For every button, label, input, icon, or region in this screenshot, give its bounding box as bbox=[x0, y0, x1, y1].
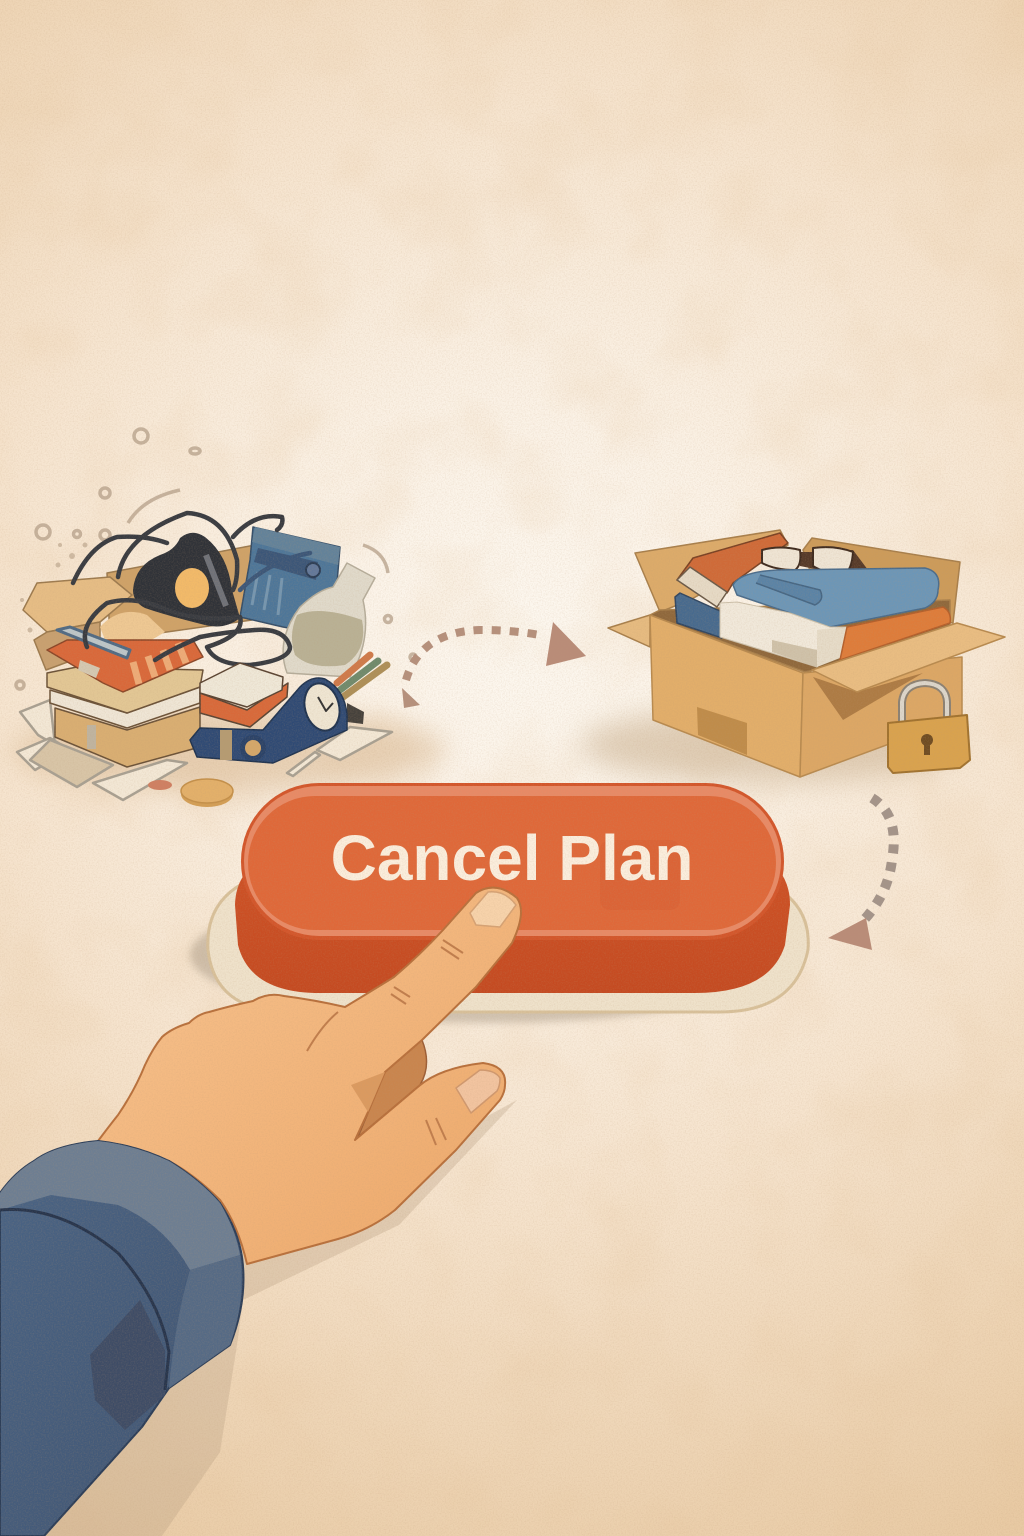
palm, thumb and index finger bbox=[98, 888, 521, 1264]
button top bbox=[241, 783, 784, 940]
button base plate bbox=[190, 880, 808, 1023]
black headset bbox=[133, 533, 240, 626]
button side bbox=[235, 850, 790, 993]
dashed arrow: pile to box bbox=[402, 622, 586, 708]
glasses bbox=[762, 547, 868, 576]
thumbnail bbox=[456, 1070, 500, 1113]
tangled cables bbox=[73, 513, 310, 713]
tan cloth bbox=[100, 612, 165, 645]
hand pressing button bbox=[0, 888, 521, 1536]
torn cardboard box bbox=[23, 545, 255, 670]
sleeve cuff bbox=[0, 1141, 244, 1536]
orange book bbox=[677, 533, 788, 607]
loose papers bbox=[17, 700, 392, 800]
blue box bbox=[675, 593, 722, 638]
Cancel Plan button bbox=[190, 783, 808, 1023]
index fingernail bbox=[470, 892, 516, 927]
hand and sleeve cast shadow bbox=[44, 1100, 517, 1536]
blue jar bbox=[240, 527, 340, 630]
back flaps bbox=[608, 530, 960, 672]
scattered dust circles bbox=[16, 429, 416, 689]
blue desk clock bbox=[190, 678, 364, 763]
book stack bbox=[47, 667, 203, 767]
striped orange towel bbox=[47, 627, 203, 692]
folded blue towel bbox=[733, 568, 939, 627]
finger-thumb crease bbox=[351, 1072, 385, 1112]
dashed arrow: box to button bbox=[828, 798, 894, 950]
cluttered pile of belongings bbox=[15, 429, 445, 807]
pencils bbox=[337, 655, 387, 697]
hidden middle finger bbox=[358, 1040, 427, 1137]
white and orange parcels bbox=[200, 663, 288, 727]
white box bbox=[720, 602, 847, 667]
button label: Cancel Plan bbox=[331, 822, 693, 894]
padlock bbox=[888, 683, 970, 773]
glass bottle bbox=[283, 563, 375, 677]
knuckle lines bbox=[307, 940, 463, 1145]
box faces bbox=[650, 615, 1005, 777]
orange cloth bbox=[840, 607, 950, 660]
coin and scrap bbox=[148, 779, 233, 807]
open cardboard box with lock bbox=[580, 530, 1005, 783]
